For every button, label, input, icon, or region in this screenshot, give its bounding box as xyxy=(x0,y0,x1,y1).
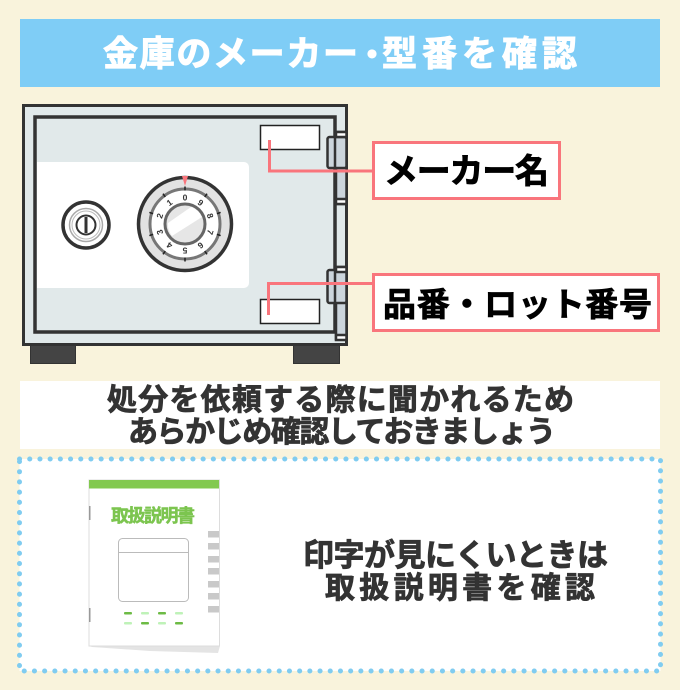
note text block: 処分を依頼する際に聞かれるため xyxy=(107,384,574,417)
dial tick marks xyxy=(149,186,221,262)
dial digits: 9 xyxy=(196,197,206,208)
icon: key cylinder xyxy=(63,202,109,248)
safe door xyxy=(35,117,335,332)
callout: lot number: 品番・ロット番号 xyxy=(383,286,652,323)
manual tip text xyxy=(303,538,608,605)
note text block: あらかじめ確認しておきましょう xyxy=(128,416,556,449)
leader line: lot number xyxy=(268,284,373,315)
title banner: 型番を確認 xyxy=(382,35,577,74)
title banner: ・ xyxy=(356,37,388,73)
manual tip text: 取扱説明書を確認 xyxy=(325,572,595,605)
leader line: maker name xyxy=(270,140,373,171)
dial digits: 5 xyxy=(182,246,187,256)
dial digits: 7 xyxy=(205,228,216,236)
safe feet xyxy=(30,345,340,364)
safe hinges xyxy=(328,132,346,340)
callout: maker name xyxy=(374,142,560,198)
callout: maker name: メーカー名 xyxy=(384,153,549,191)
manual title: 取扱説明書 xyxy=(111,505,195,526)
dial digits: 0 xyxy=(183,192,188,202)
manual green spine xyxy=(89,480,219,488)
maker name plate xyxy=(260,126,320,150)
white door panel xyxy=(37,162,249,288)
title banner: 金庫のメーカー xyxy=(103,35,358,74)
manual index tabs xyxy=(208,531,219,612)
manual dashes xyxy=(124,612,183,624)
manual spine staples xyxy=(89,506,90,622)
dial digits: 3 xyxy=(154,228,165,236)
dial digits: 4 xyxy=(164,240,174,251)
note text block xyxy=(20,381,660,449)
manual window xyxy=(118,538,188,602)
dial digits: 8 xyxy=(205,212,216,220)
dial digits xyxy=(154,192,216,256)
title banner xyxy=(20,19,660,87)
illustration: instruction manual xyxy=(89,480,220,653)
manual tip text: 印字が見にくいときは xyxy=(303,538,608,573)
dial digits: 6 xyxy=(196,240,205,251)
illustration: safe xyxy=(24,106,346,364)
icon: combination dial xyxy=(138,176,232,270)
callout: lot number xyxy=(374,274,658,330)
lot number plate xyxy=(260,300,320,324)
dial digits: 1 xyxy=(165,197,174,208)
panel: manual tip xyxy=(20,459,660,671)
safe body xyxy=(24,106,346,344)
dial digits: 2 xyxy=(154,212,165,220)
